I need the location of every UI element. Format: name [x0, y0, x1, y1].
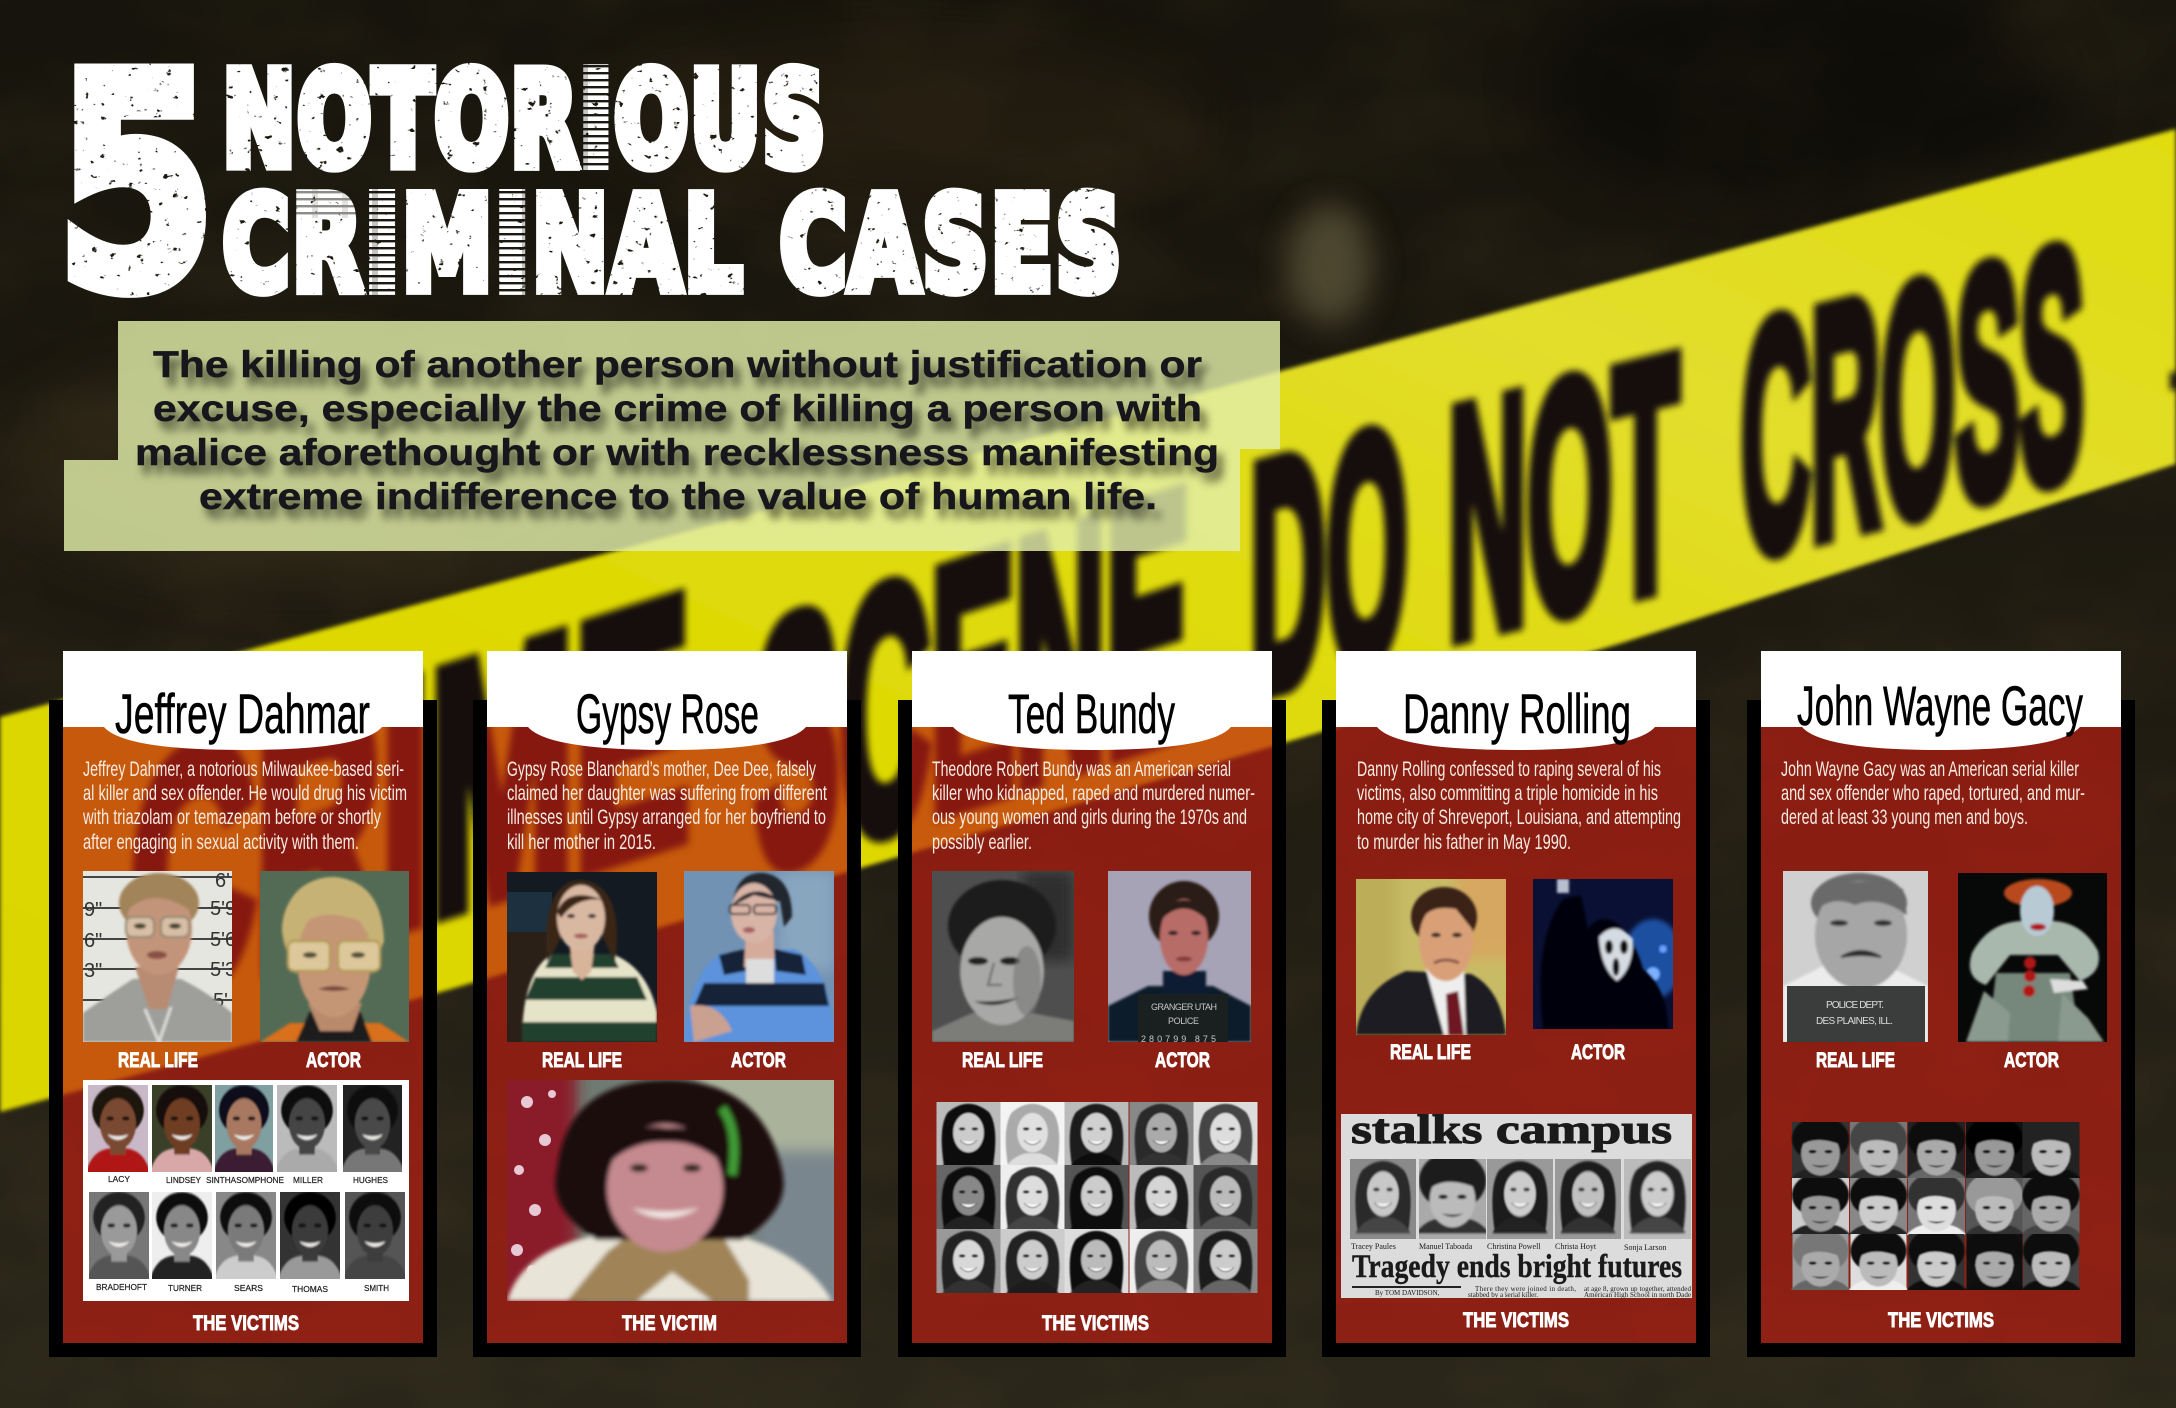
biography: Danny Rolling confessed to raping several of his — [1357, 758, 1661, 781]
newspaper clipping: stabbed by a serial killer. — [1468, 1291, 1538, 1299]
callout text: malice aforethought or with recklessness manifesting — [135, 432, 1219, 473]
newspaper clipping: There they were joined in death, — [1475, 1285, 1576, 1293]
photo: Gypsy actor — [684, 871, 834, 1042]
label: real life: REAL LIFE — [542, 1049, 622, 1072]
tape lettering: CRIME — [130, 521, 690, 1083]
victims photo grid: HUGHES — [353, 1176, 388, 1185]
label: the victims: THE VICTIMS — [1042, 1312, 1149, 1335]
tape lettering: SCENE — [755, 417, 1190, 946]
label: real life: REAL LIFE — [118, 1049, 198, 1072]
photo: Gacy real life: DES PLAINES, ILL. — [1816, 1016, 1893, 1027]
biography: possibly earlier. — [932, 831, 1032, 854]
panel: Gypsy Rose — [473, 651, 861, 1357]
newspaper clipping: Christa Hoyt — [1555, 1242, 1597, 1251]
biography: to murder his father in May 1990. — [1357, 831, 1571, 854]
biography: Theodore Robert Bundy was an American serial — [932, 758, 1231, 781]
label: the victim: THE VICTIM — [622, 1312, 717, 1335]
callout text: extreme indifference to the value of human life. — [199, 476, 1157, 517]
photo: Bundy actor: 280799 875 — [1141, 1034, 1216, 1044]
photo: Bundy actor — [1108, 871, 1251, 1044]
victims photo grid: MILLER — [293, 1176, 323, 1185]
victims photo grid — [1789, 1116, 2082, 1291]
biography: claimed her daughter was suffering from different — [507, 782, 827, 805]
victims photo grid: THOMAS — [292, 1285, 328, 1294]
label: the victims: THE VICTIMS — [1888, 1309, 1994, 1332]
tape lettering — [130, 176, 2176, 1083]
callout text: excuse, especially the crime of killing a person with — [153, 388, 1202, 429]
photo: Dahmer real life: 6" — [84, 930, 102, 952]
name: Ted Bundy — [1008, 682, 1175, 745]
newspaper clipping: American High School in north Dade — [1584, 1291, 1691, 1299]
photo: Dahmer real life: 5'9 — [210, 898, 236, 920]
biography: dered at least 33 young men and boys. — [1781, 806, 2028, 829]
panel: Danny Rolling — [1322, 651, 1710, 1357]
biography: killer who kidnapped, raped and murdered numer- — [932, 782, 1255, 805]
newspaper clipping: Sonja Larson — [1624, 1243, 1666, 1252]
label: actor: ACTOR — [1155, 1049, 1210, 1072]
biography: ous young women and girls during the 1970s and — [932, 806, 1247, 829]
label: actor: ACTOR — [1571, 1041, 1625, 1064]
photo: Dee Dee Blanchard — [507, 1080, 834, 1301]
name: Gypsy Rose — [576, 682, 759, 745]
photo: Dahmer real life: 5'3 — [210, 959, 236, 981]
title line: notorious: NOTORIOUS — [223, 46, 825, 194]
label: the victims: THE VICTIMS — [1463, 1309, 1569, 1332]
label: the victims: THE VICTIMS — [193, 1312, 299, 1335]
victims photo grid: LINDSEY — [166, 1176, 202, 1185]
name: Jeffrey Dahmar — [115, 682, 370, 745]
biography: Jeffrey Dahmer, a notorious Milwaukee-based seri- — [83, 758, 404, 781]
victims photo grid: SINTHASOMPHONE — [206, 1176, 284, 1185]
biography: kill her mother in 2015. — [507, 831, 656, 854]
victims photo grid: SMITH — [364, 1284, 389, 1293]
tape lettering: NOT — [1448, 287, 1679, 707]
label: real life: REAL LIFE — [962, 1049, 1043, 1072]
photo: Dahmer real life: 3" — [84, 960, 102, 982]
label: actor: ACTOR — [2004, 1049, 2059, 1072]
photo: Gacy actor — [1958, 873, 2107, 1042]
biography: illnesses until Gypsy arranged for her boyfriend to — [507, 806, 826, 829]
victims photo grid — [936, 1102, 1258, 1294]
photo: Gypsy real life — [507, 872, 657, 1042]
photo: Bundy actor: GRANGER UTAH — [1151, 1002, 1217, 1012]
newspaper clipping: Christina Powell — [1487, 1242, 1541, 1251]
name: Danny Rolling — [1403, 682, 1631, 745]
victims photo grid — [83, 1080, 409, 1301]
photo: Dahmer real life — [83, 870, 236, 1042]
biography: after engaging in sexual activity with them. — [83, 831, 359, 854]
label: actor: ACTOR — [306, 1049, 361, 1072]
newspaper clipping: stalks campus — [1351, 1106, 1672, 1152]
newspaper clipping: at age 8, grown up together, attended — [1584, 1285, 1692, 1293]
biography: Gypsy Rose Blanchard’s mother, Dee Dee, falsely — [507, 758, 816, 781]
newspaper clipping — [1341, 1106, 1692, 1299]
photo: Dahmer real life: 6' — [215, 870, 230, 892]
victims photo grid: TURNER — [168, 1284, 202, 1293]
photo: Bundy actor: POLICE — [1168, 1016, 1199, 1026]
biography — [82, 758, 407, 854]
panel: Ted Bundy — [898, 651, 1286, 1357]
biography: with triazolam or temazepam before or shortly — [82, 806, 381, 829]
photo: Gacy real life — [1783, 871, 1928, 1042]
panel: John Wayne Gacy — [1747, 651, 2135, 1357]
photo: Dahmer real life: 5'6 — [210, 929, 236, 951]
biography: al killer and sex offender. He would drug his victim — [83, 782, 407, 805]
victims photo grid: BRADEHOFT — [96, 1283, 147, 1292]
photo: Rolling actor — [1533, 879, 1673, 1029]
crime scene tape — [0, 129, 2176, 1112]
victims photo grid: LACY — [108, 1175, 131, 1184]
biography: victims, also committing a triple homicide in his — [1357, 782, 1658, 805]
tape lettering: DO — [1250, 357, 1408, 765]
photo: Dahmer actor — [260, 871, 409, 1042]
photo: Gacy real life: POLICE DEPT. — [1826, 1000, 1884, 1011]
biography — [932, 758, 1255, 854]
newspaper clipping: By TOM DAVIDSON, — [1375, 1289, 1440, 1297]
panel: Jeffrey Dahmer — [49, 651, 437, 1357]
newspaper clipping: Tracey Paules — [1351, 1242, 1396, 1251]
big numeral 5: 5 — [56, 14, 216, 356]
title — [56, 14, 1121, 356]
biography — [507, 758, 827, 854]
victims photo grid: SEARS — [234, 1284, 263, 1293]
photo: Dahmer real life: 9" — [84, 899, 102, 921]
newspaper clipping: Manuel Taboada — [1419, 1242, 1473, 1251]
biography — [1781, 758, 2085, 829]
title line: criminal cases: CRIMINAL CASES — [223, 171, 1121, 320]
label: real life: REAL LIFE — [1390, 1041, 1471, 1064]
photo: Rolling real life — [1356, 879, 1506, 1035]
definition callout — [64, 321, 1280, 551]
callout text — [135, 344, 1219, 517]
label: real life: REAL LIFE — [1816, 1049, 1895, 1072]
callout text: The killing of another person without justification or — [153, 344, 1202, 385]
photo: Bundy real life — [932, 871, 1074, 1042]
label: actor: ACTOR — [731, 1049, 786, 1072]
photo: Dahmer real life: 5' — [213, 990, 228, 1012]
biography — [1357, 758, 1681, 854]
biography: home city of Shreveport, Louisiana, and attempting — [1357, 806, 1681, 829]
